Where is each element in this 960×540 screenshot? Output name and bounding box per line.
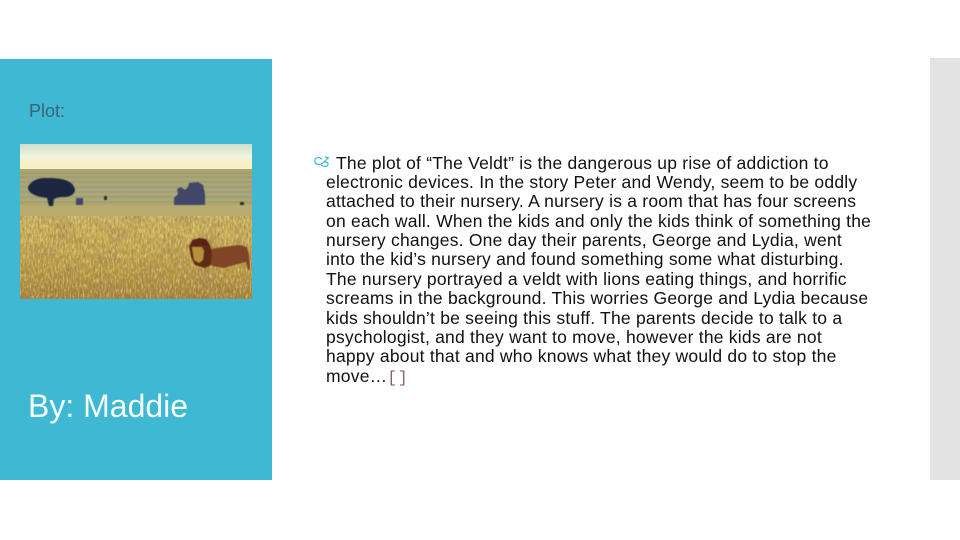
text block: plot summary: psychologist, and they want to move, however the kids are not — [326, 327, 822, 347]
text block: plot summary — [326, 152, 871, 387]
bushes — [76, 182, 244, 205]
image: lion in the veldt — [20, 144, 252, 299]
text block: plot summary: attached to their nursery. A nursery is a room that has four screens — [326, 191, 856, 211]
text block: plot summary: happy about that and who knows what they would do to stop the — [326, 346, 837, 366]
text block: plot summary: electronic devices. In the story Peter and Wendy, seem to be oddly — [326, 172, 857, 192]
text block: plot summary: screams in the background. This worries George and Lydia because — [326, 288, 868, 308]
icon: bullet ornament — [314, 156, 330, 167]
text block: plot summary: kids shouldn’t be seeing this stuff. The parents decide to talk to a — [326, 308, 842, 328]
panel: left blue sidebar — [0, 59, 272, 480]
heading: author: By: Maddie — [28, 388, 188, 424]
text block: plot summary: The nursery portrayed a veldt with lions eating things, and horrific — [326, 269, 847, 289]
lion — [189, 238, 250, 270]
text block: plot summary: move…[] — [326, 366, 409, 387]
text block: plot summary: The plot of “The Veldt” is the dangerous up rise of addiction to — [336, 152, 829, 172]
text block: plot summary: nursery changes. One day their parents, George and Lydia, went — [326, 230, 842, 250]
text block: plot summary: on each wall. When the kids and only the kids think of something the — [326, 211, 871, 231]
text block: plot summary: into the kid’s nursery and found something some what disturbing. — [326, 249, 844, 269]
panel: right grey bar — [930, 58, 960, 480]
heading: plot label: Plot: — [29, 101, 65, 121]
tree — [28, 178, 75, 206]
